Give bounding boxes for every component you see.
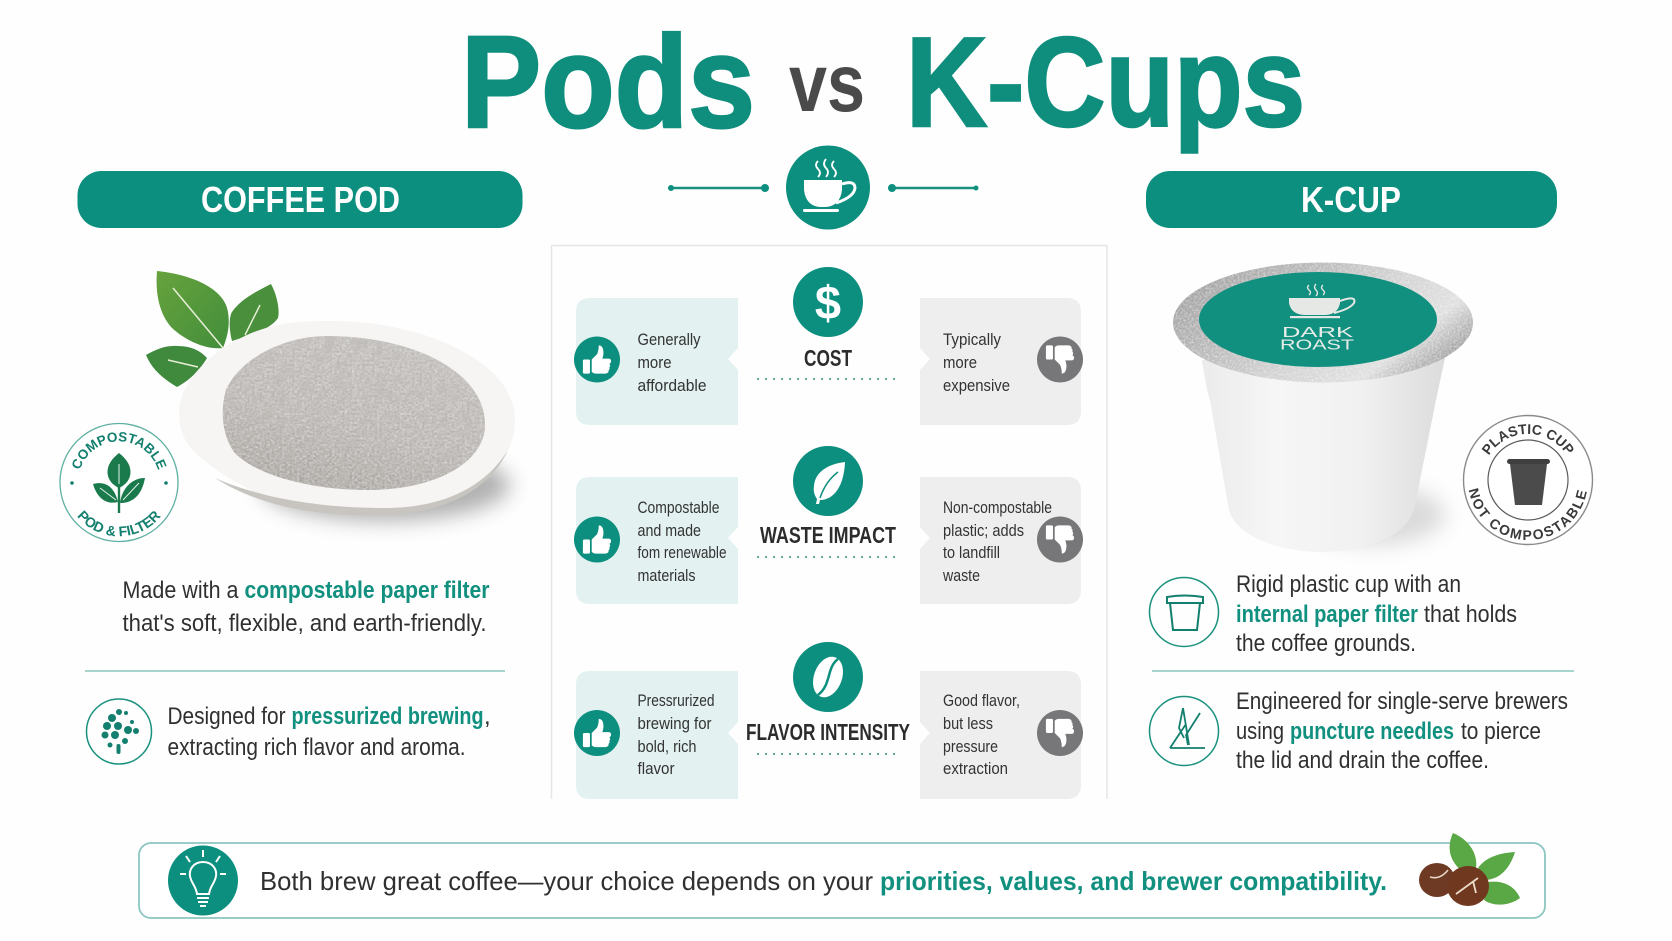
text: k-cup description bbox=[1236, 571, 1517, 657]
text: pod description bbox=[122, 577, 490, 637]
label: waste impact: WASTE IMPACT bbox=[760, 522, 896, 548]
pod card: waste: fom renewable bbox=[638, 544, 726, 562]
illustration: k-cup: DARK bbox=[1282, 325, 1354, 341]
bottom banner: priorities, values, and brewer compatibility. bbox=[880, 866, 1387, 896]
text: pressurized brewing: pressurized brewing bbox=[292, 703, 484, 730]
row: flavor intensity bbox=[574, 642, 1083, 799]
bottom banner: Both brew great coffee—your choice depends on your bbox=[260, 866, 873, 896]
leaves bbox=[146, 271, 279, 387]
row: waste impact bbox=[574, 446, 1083, 604]
pod card: waste: Compostable bbox=[638, 499, 720, 517]
pod card: waste: materials bbox=[638, 567, 696, 585]
k-cup card: cost bbox=[920, 298, 1083, 425]
icon: coffee bean bbox=[793, 642, 863, 712]
pod card: flavor: Pressrurized bbox=[638, 692, 714, 710]
panel: comparison table bbox=[552, 246, 1107, 799]
icon: dollar bbox=[793, 267, 863, 337]
badge: compostable pod and filter: POD & FILTER bbox=[78, 510, 161, 536]
icon: leaf bbox=[793, 446, 863, 516]
text: k-cup description: the coffee grounds. bbox=[1236, 630, 1416, 657]
icon: coffee beans with leaves bbox=[1419, 833, 1520, 906]
text: puncture needles: Engineered for single-serve brewers bbox=[1236, 688, 1568, 715]
text: pressurized brewing: extracting rich flavor and aroma. bbox=[168, 734, 466, 761]
k-cup card: waste: Non-compostable bbox=[943, 499, 1052, 517]
text: pod description: compostable paper filter bbox=[244, 577, 490, 604]
k-cup card: waste: plastic; adds bbox=[943, 522, 1024, 540]
k-cup card: waste: to landfill bbox=[943, 544, 1000, 562]
illustration: k-cup: ROAST bbox=[1280, 338, 1354, 354]
pod card: cost: Generally bbox=[638, 331, 701, 349]
text: k-cup description: internal paper filter bbox=[1236, 601, 1418, 628]
illustration: k-cup bbox=[1173, 262, 1473, 552]
text: pressurized brewing: Designed for bbox=[168, 703, 286, 730]
k-cup card: cost: Typically bbox=[943, 331, 1002, 349]
badge: plastic cup not compostable: NOT COMPOSTABLE bbox=[1468, 488, 1587, 540]
pod card: flavor bbox=[574, 671, 738, 799]
text: pressurized brewing bbox=[168, 703, 491, 761]
header pill: k-cup bbox=[1146, 171, 1557, 228]
k-cup card: waste: waste bbox=[942, 567, 980, 585]
k-cup card: waste bbox=[920, 477, 1083, 604]
pod card: cost: affordable bbox=[638, 377, 706, 395]
title: Pods bbox=[461, 8, 755, 155]
label: cost: COST bbox=[804, 345, 852, 371]
text: puncture needles: puncture needles bbox=[1290, 718, 1454, 745]
pod card: waste: and made bbox=[638, 522, 701, 540]
badge: compostable pod and filter: COMPOSTABLE bbox=[72, 432, 167, 470]
text: pod description: that's soft, flexible, and earth-friendly. bbox=[122, 610, 486, 637]
center coffee cup emblem with side lines bbox=[668, 146, 978, 230]
k-cup card: cost: more bbox=[943, 354, 977, 372]
text: puncture needles bbox=[1236, 688, 1568, 774]
badge: plastic cup not compostable bbox=[1462, 414, 1594, 546]
pod card: flavor: bold, rich bbox=[638, 738, 696, 756]
k-cup card: flavor: Good flavor, bbox=[943, 692, 1020, 710]
row: cost bbox=[574, 267, 1083, 425]
text: k-cup description: that holds bbox=[1424, 601, 1517, 628]
icon: pressure dots bbox=[86, 699, 152, 764]
badge: compostable pod and filter bbox=[59, 422, 179, 542]
illustration: coffee pod with leaves bbox=[146, 271, 515, 521]
k-cup card: flavor: but less bbox=[943, 715, 993, 733]
text: k-cup description: Rigid plastic cup with an bbox=[1236, 571, 1461, 598]
pod card: flavor: brewing for bbox=[638, 715, 712, 733]
pod card: cost: more bbox=[638, 354, 672, 372]
k-cup card: flavor bbox=[920, 671, 1083, 799]
plant icon bbox=[93, 453, 145, 513]
icon: dollar: $ bbox=[815, 276, 841, 329]
text: pod description: Made with a bbox=[122, 577, 239, 604]
text: puncture needles: to pierce bbox=[1461, 718, 1541, 745]
pod card: cost bbox=[574, 298, 738, 425]
title bbox=[461, 8, 1305, 155]
text: puncture needles: the lid and drain the coffee. bbox=[1236, 747, 1489, 774]
k-cup card: cost: expensive bbox=[943, 377, 1010, 395]
header pill: k-cup: K-CUP bbox=[1301, 179, 1401, 220]
text: puncture needles: using bbox=[1236, 718, 1284, 745]
title: K-Cups bbox=[906, 11, 1305, 153]
header pill: coffee pod bbox=[78, 171, 522, 228]
title: vs bbox=[789, 38, 865, 129]
icon: light bulb bbox=[168, 846, 238, 916]
icon: puncture needle bbox=[1150, 696, 1218, 766]
pod card: flavor: flavor bbox=[638, 760, 675, 778]
header pill: coffee pod: COFFEE POD bbox=[201, 179, 400, 220]
k-cup card: flavor: pressure bbox=[943, 738, 998, 756]
pod card: waste bbox=[574, 477, 738, 604]
bottom banner bbox=[139, 833, 1545, 918]
lid cup icon bbox=[1289, 284, 1354, 318]
text: pressurized brewing: , bbox=[484, 703, 491, 730]
label: flavor intensity: FLAVOR INTENSITY bbox=[746, 719, 910, 745]
icon: plastic cup outline bbox=[1150, 578, 1218, 646]
k-cup card: flavor: extraction bbox=[943, 760, 1008, 778]
badge: plastic cup not compostable: PLASTIC CUP bbox=[1482, 424, 1574, 455]
